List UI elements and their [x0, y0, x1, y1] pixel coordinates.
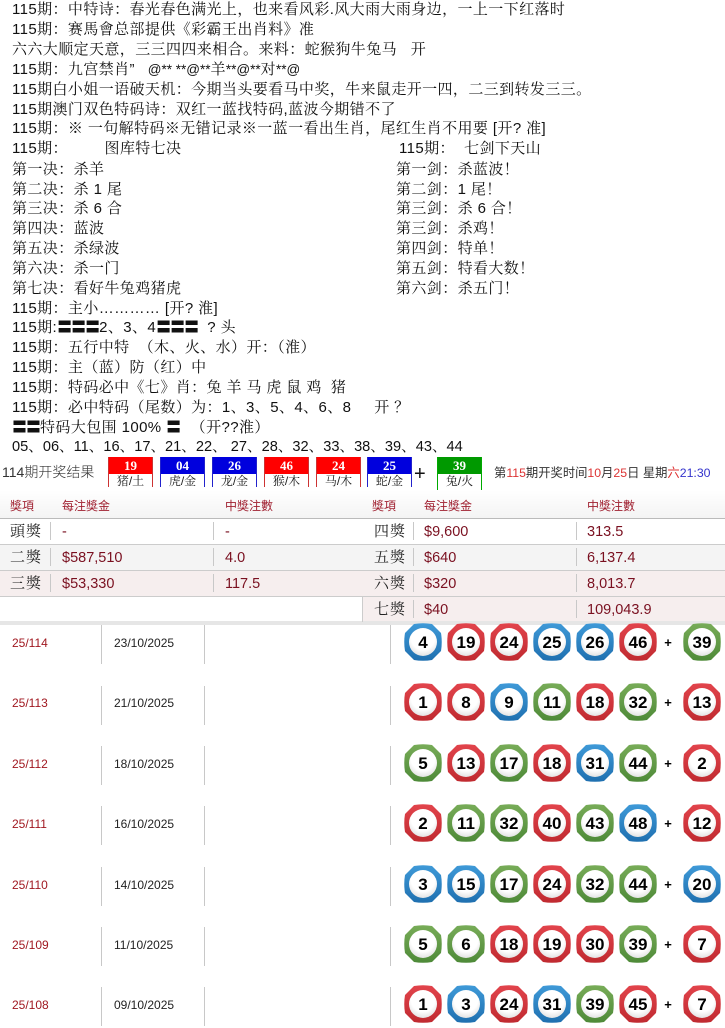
- balls row 25/112: 44: [629, 754, 648, 773]
- balls row 25/110: 32: [586, 875, 604, 894]
- row: seventh prize: $40: [424, 602, 448, 618]
- row: fourth prize: [374, 523, 623, 540]
- line: seven zodiacs: 115期：特码必中《七》肖：兔 羊 马 虎 鼠 鸡 猪: [12, 379, 346, 396]
- balls row 25/112: 31: [586, 754, 604, 773]
- balls row 25/108: +: [664, 997, 672, 1012]
- ball tag 26: 26: [228, 458, 241, 473]
- line: numbers: 05、06、11、16、17、21、22、 27、28、32、33、38、39、43、44: [12, 439, 463, 455]
- balls row 25/108: 39: [586, 995, 604, 1014]
- balls row 25/113: 9: [504, 693, 514, 712]
- balls row 25/114: [404, 623, 721, 661]
- balls row 25/113: 18: [586, 693, 604, 712]
- balls row 25/108: 24: [500, 995, 519, 1014]
- text block: prediction lines: 第二剑：1 尾！: [396, 181, 502, 198]
- ball tag 46: [264, 457, 309, 487]
- panel: past results labels: 18/10/2025: [114, 757, 174, 771]
- balls row 25/108: 3: [461, 995, 471, 1014]
- table header left: 獎項: [10, 499, 34, 513]
- ball tag 24: [316, 457, 361, 487]
- row: fourth prize: 四獎: [374, 523, 406, 540]
- balls row 25/109: 30: [586, 935, 604, 954]
- panel: past results labels: 25/109: [12, 938, 49, 952]
- ball tag 19: [108, 457, 153, 487]
- line: colour: 115期：主（蓝）防（红）中: [12, 359, 207, 376]
- row: first prize: 頭獎: [10, 523, 42, 540]
- panel: past results labels: 25/113: [12, 696, 48, 710]
- row dividers and dates: [101, 625, 102, 664]
- panel: past results labels: 23/10/2025: [114, 636, 174, 650]
- table header left: [10, 499, 273, 513]
- row: seventh prize: 七獎: [374, 601, 406, 618]
- panel: past results labels: 25/108: [12, 998, 49, 1012]
- ball tag 04: [160, 457, 205, 487]
- balls row 25/109: 39: [629, 935, 647, 954]
- row: third prize: 117.5: [225, 576, 260, 592]
- ball tag 46: 46: [280, 458, 293, 473]
- balls row 25/110: +: [664, 877, 672, 892]
- row: third prize: $53,330: [62, 576, 114, 592]
- ball tag 19: 19: [124, 458, 137, 473]
- balls row 25/112: 17: [500, 754, 518, 773]
- panel: past results labels: 25/110: [12, 878, 48, 892]
- balls row 25/114: 26: [586, 633, 604, 652]
- balls row 25/109: 18: [500, 935, 518, 954]
- row: fifth prize: 6,137.4: [587, 550, 635, 566]
- balls row 25/108: 1: [418, 995, 428, 1014]
- row: second prize: [10, 549, 245, 566]
- balls row 25/111: 43: [586, 814, 604, 833]
- line 7: 115期：※ 一句解特码※无错记录※一蓝一看出生肖，尾红生肖不用要 [开? 准]: [12, 120, 546, 137]
- text block: prediction lines: 第六决：杀一门: [12, 260, 120, 277]
- text block: prediction lines: 第六剑：杀五门！: [396, 280, 519, 297]
- balls row 25/108: [404, 985, 721, 1023]
- balls row 25/108: 31: [543, 995, 561, 1014]
- balls row 25/111: [404, 804, 721, 842]
- line: main small: 115期：主小………… [开? 淮]: [12, 300, 218, 317]
- balls row 25/109: 5: [418, 935, 428, 954]
- list: seven tips: 第一决：杀羊: [12, 161, 104, 178]
- panel: past results labels: [12, 625, 391, 1026]
- line 6: 115期澳门双色特码诗：双红一蓝找特码,蓝波今期错不了: [12, 101, 396, 118]
- balls row 25/112: 13: [457, 754, 475, 773]
- ball tag 39: [437, 457, 482, 491]
- ball tag 25: 25: [383, 458, 396, 473]
- table header left: 每注獎金: [62, 499, 110, 513]
- text block: prediction lines: 第七决：看好牛兔鸡猪虎: [12, 280, 181, 297]
- balls row 25/109: 7: [697, 935, 707, 954]
- ball tag 26: [212, 457, 257, 487]
- text block: prediction lines: 第三剑：杀鸡！: [396, 220, 504, 237]
- balls row 25/113: 32: [629, 693, 647, 712]
- balls row 25/114: 46: [629, 633, 647, 652]
- text block: prediction lines: [12, 1, 592, 455]
- text block: prediction lines: 第四剑：特单！: [396, 240, 504, 257]
- panel: past results labels: 25/112: [12, 757, 48, 771]
- ball tag 25: [367, 457, 412, 487]
- panel: past results labels: 21/10/2025: [114, 696, 174, 710]
- row: fourth prize: $9,600: [424, 524, 468, 540]
- row: second prize: 二獎: [10, 549, 42, 566]
- row: fourth prize: 313.5: [587, 524, 623, 540]
- row: second prize: 4.0: [225, 550, 245, 566]
- balls row 25/111: 32: [500, 814, 518, 833]
- balls row 25/112: 2: [697, 754, 707, 773]
- balls row 25/109: 6: [461, 935, 471, 954]
- row: first prize: -: [225, 524, 230, 540]
- balls row 25/111: 2: [418, 814, 428, 833]
- balls row 25/110: 44: [629, 875, 648, 894]
- balls row 25/109: 19: [543, 935, 561, 954]
- balls row 25/110: 24: [543, 875, 562, 894]
- next draw time: 第115期开奖时间10月25日 星期六21:30: [494, 466, 711, 480]
- line 3: 六六大顺定天意，三三四四来相合。来料：蛇猴狗牛兔马 开: [12, 41, 426, 58]
- balls row 25/114: +: [664, 635, 672, 650]
- balls row 25/114: 4: [418, 633, 428, 652]
- balls row 25/114: 24: [500, 633, 519, 652]
- chart: lottery balls: [404, 623, 721, 1023]
- heading: tuku seven: 115期： 图库特七决: [12, 140, 181, 157]
- row: first prize: -: [62, 524, 67, 540]
- row: second prize: $587,510: [62, 550, 122, 566]
- table header right: [372, 499, 635, 513]
- ball tag 04: 04: [176, 458, 189, 473]
- plus sign: +: [414, 463, 426, 485]
- text block: prediction lines: 第五剑：特看大数！: [396, 260, 535, 277]
- balls row 25/114: 39: [693, 633, 711, 652]
- table header left: 中獎注數: [225, 499, 273, 513]
- panel: past results labels: 11/10/2025: [114, 938, 173, 952]
- row: third prize: 三獎: [10, 575, 42, 592]
- balls row 25/114: 19: [457, 633, 475, 652]
- row: fifth prize: 五獎: [374, 549, 406, 566]
- balls row 25/112: +: [664, 756, 672, 771]
- line 4: 115期：九宫禁肖” @** **@**羊**@**对**@: [12, 61, 300, 78]
- label: issue 114 result: 114期开奖结果: [2, 464, 94, 480]
- panel: past results labels: 14/10/2025: [114, 878, 174, 892]
- row: sixth prize: 六獎: [374, 575, 406, 592]
- balls row 25/111: 11: [457, 814, 475, 833]
- row: fifth prize: $640: [424, 550, 456, 566]
- text block: prediction lines: 第四决：蓝波: [12, 220, 104, 237]
- balls row 25/112: [404, 744, 721, 782]
- table header right: 獎項: [372, 499, 396, 513]
- balls row 25/109: [404, 925, 721, 963]
- panel: past results labels: 16/10/2025: [114, 817, 174, 831]
- balls row 25/108: 45: [629, 995, 647, 1014]
- panel: past results labels: 25/114: [12, 636, 48, 650]
- list: six swords: 第一剑：杀蓝波！: [396, 161, 519, 178]
- balls row 25/110: 20: [693, 875, 711, 894]
- line: tail numbers: 115期：必中特码（尾数）为：1、3、5、4、6、8 开 ？: [12, 399, 410, 416]
- table header right: 每注獎金: [424, 499, 472, 513]
- balls row 25/108: 7: [697, 995, 707, 1014]
- balls row 25/113: 8: [461, 693, 471, 712]
- ball tag 39: 39: [453, 458, 466, 473]
- row: third prize: [10, 575, 260, 592]
- balls row 25/111: 12: [693, 814, 711, 833]
- line: five elements: 115期：五行中特 （木、火、水）开：（淮）: [12, 339, 316, 356]
- balls row 25/113: 11: [543, 693, 561, 712]
- heading: seven swords: 115期： 七剑下天山: [399, 140, 541, 157]
- line: big cover: 〓〓特码大包围 100% 〓 （开??淮）: [12, 419, 270, 436]
- balls row 25/110: 17: [500, 875, 518, 894]
- row: sixth prize: 8,013.7: [587, 576, 635, 592]
- balls row 25/113: 13: [693, 693, 711, 712]
- text block: prediction lines: 第五决：杀绿波: [12, 240, 120, 257]
- panel: past results labels: 09/10/2025: [114, 998, 174, 1012]
- row: first prize: [10, 523, 230, 540]
- line 1: 115期：中特诗：春光春色满光上，也来看风彩.风大雨大雨身边，一上一下红落时: [12, 1, 565, 18]
- balls row 25/113: 1: [418, 693, 428, 712]
- balls row 25/113: +: [664, 695, 672, 710]
- row: sixth prize: [374, 575, 635, 592]
- balls row 25/113: [404, 683, 721, 721]
- table header right: 中獎注數: [587, 499, 635, 513]
- row: fifth prize: [374, 549, 635, 566]
- ball tag 39: 兔/火: [446, 474, 473, 488]
- text block: prediction lines: 第三决：杀 6 合: [12, 200, 122, 217]
- line 5: 115期白小姐一语破天机：今期当头要看马中奖，牛来鼠走开一四，二三到转发三三。: [12, 81, 592, 98]
- balls row 25/110: 15: [457, 875, 475, 894]
- ball tag 24: 24: [332, 458, 345, 473]
- text block: prediction lines: 第二决：杀 1 尾: [12, 181, 122, 198]
- balls row 25/111: 48: [629, 814, 647, 833]
- panel: past results labels: 25/111: [12, 817, 47, 831]
- balls row 25/111: +: [664, 816, 672, 831]
- line: head numbers: 115期:〓〓〓2、3、4〓〓〓 ? 头: [12, 319, 236, 336]
- row: sixth prize: $320: [424, 576, 456, 592]
- balls row 25/114: 25: [543, 633, 561, 652]
- balls row 25/110: 3: [418, 875, 428, 894]
- balls row 25/112: 18: [543, 754, 561, 773]
- balls row 25/111: 40: [543, 814, 561, 833]
- balls row 25/110: [404, 865, 721, 903]
- balls row 25/109: +: [664, 937, 672, 952]
- balls row 25/112: 5: [418, 754, 428, 773]
- row: seventh prize: [374, 601, 652, 618]
- panel: prize table: [0, 490, 725, 625]
- text block: prediction lines: 第三剑：杀 6 合！: [396, 200, 522, 217]
- line 2: 115期：赛馬會总部提供《彩霸王出肖料》准: [12, 21, 314, 38]
- row: seventh prize: 109,043.9: [587, 602, 652, 618]
